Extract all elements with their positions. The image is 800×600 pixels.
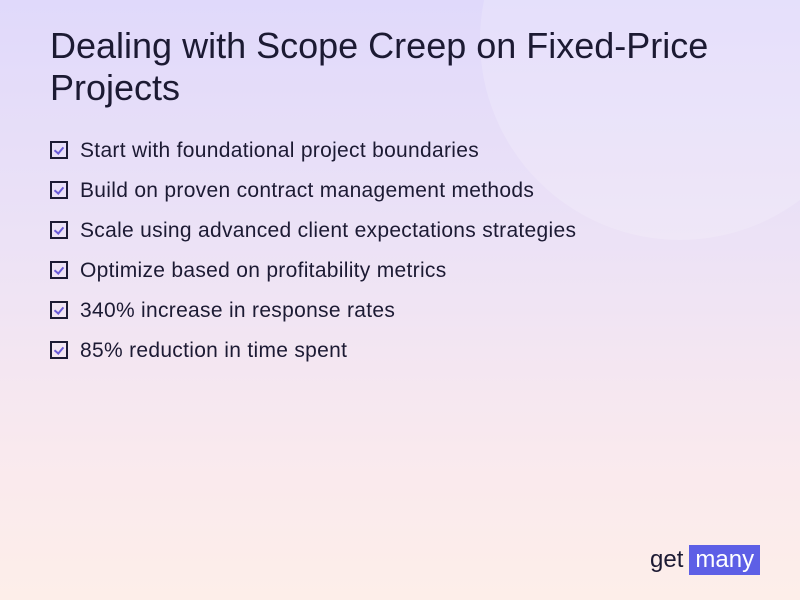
logo: get <box>650 546 683 573</box>
title: Dealing with Scope Creep on Fixed-Price Projects <box>50 25 708 108</box>
item 3: Scale using advanced client expectations strategies <box>80 219 576 242</box>
item 4: Optimize based on profitability metrics <box>80 259 447 282</box>
logo: many <box>695 546 754 573</box>
item 2: Build on proven contract management methods <box>80 179 534 202</box>
item 5: 340% increase in response rates <box>80 299 395 322</box>
item 1: Start with foundational project boundaries <box>80 139 479 162</box>
item 6: 85% reduction in time spent <box>80 339 347 362</box>
checklist <box>50 139 576 362</box>
logo <box>650 545 760 575</box>
